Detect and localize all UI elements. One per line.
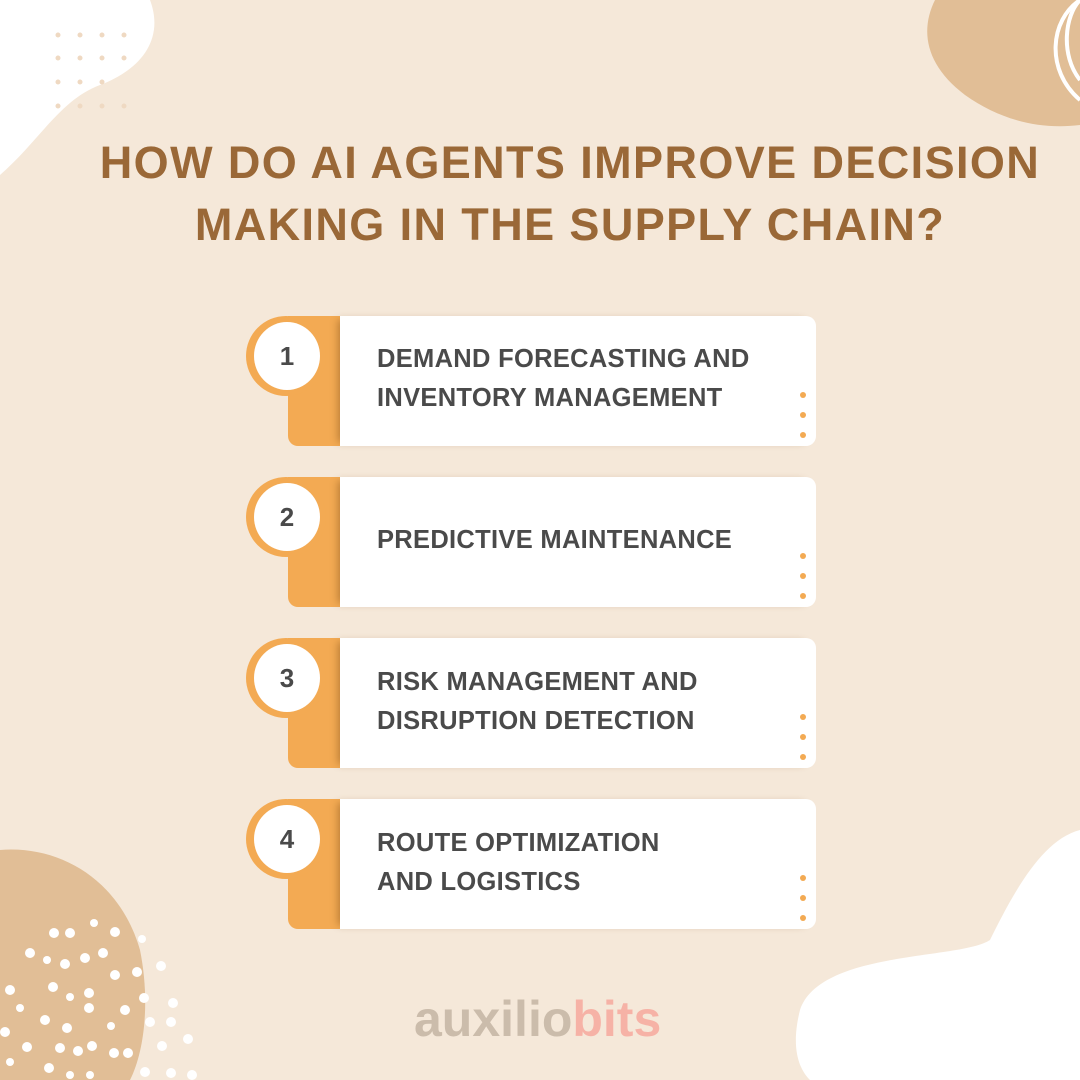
- card 1: DEMAND FORECASTING AND: [377, 345, 750, 373]
- card 4: [246, 798, 816, 930]
- card 3: DISRUPTION DETECTION: [377, 707, 695, 735]
- card 2: [246, 476, 816, 608]
- card 4: 4: [280, 824, 294, 854]
- card 4: ROUTE OPTIMIZATION: [377, 829, 660, 857]
- card 1: 1: [280, 341, 294, 371]
- card 3: RISK MANAGEMENT AND: [377, 668, 698, 696]
- card 1: INVENTORY MANAGEMENT: [377, 384, 723, 412]
- card 3: 3: [280, 663, 294, 693]
- card 2: 2: [280, 502, 294, 532]
- title: HOW DO AI AGENTS IMPROVE DECISION: [100, 137, 1040, 188]
- card 1: [246, 314, 816, 448]
- card 2: PREDICTIVE MAINTENANCE: [377, 526, 732, 554]
- card 4: AND LOGISTICS: [377, 868, 581, 896]
- title: MAKING IN THE SUPPLY CHAIN?: [195, 199, 945, 250]
- logo: auxiliobits: [414, 991, 661, 1047]
- card 3: [246, 636, 816, 770]
- title: [100, 137, 1040, 250]
